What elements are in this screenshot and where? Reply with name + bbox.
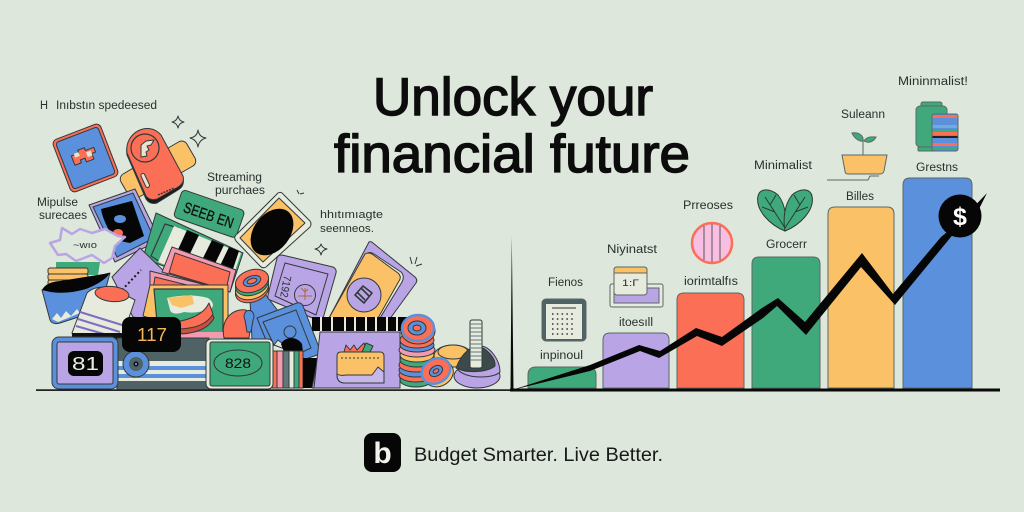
icon: yellow backing tag (118, 139, 198, 201)
label: right pile note: seenneos. (320, 223, 374, 235)
icon: yellow card with black oval (235, 192, 311, 268)
label: streaming purchases (207, 172, 265, 197)
label: impulse purchases (37, 197, 87, 222)
chart labels: iorimtalfıs (684, 276, 738, 288)
label: top spending heading: H (40, 100, 48, 112)
icon: green backing shape (56, 262, 100, 275)
icon: twin leaves (758, 190, 812, 231)
title (334, 68, 690, 184)
icon: burst badge (50, 228, 125, 263)
icon: pink frame cards (143, 247, 236, 338)
icon: green 828 note: 828 (225, 355, 251, 371)
title: Unlock your (373, 68, 653, 127)
chart labels: Mininmalist! (898, 76, 968, 88)
icon: purple lined card (112, 248, 168, 320)
icon: green 828 note (206, 339, 273, 389)
label: top spending heading: Inıbstın spedeesed (56, 100, 157, 112)
icon: potted sprout (827, 133, 887, 180)
icon: film strip bar (312, 317, 408, 331)
label: streaming purchases: Streaming (207, 172, 262, 184)
bar: itoesill (603, 333, 669, 388)
icon: coin stacks (399, 315, 472, 392)
bar: grestns (903, 178, 972, 388)
icon: red device (127, 128, 183, 204)
icon: purple 7192 card (268, 255, 336, 322)
bar: billes (828, 207, 894, 388)
chart labels: Grestns (916, 162, 958, 174)
bar: iorimtalfis (677, 293, 744, 388)
icon: colored strip stack (272, 351, 322, 388)
chart axes (36, 236, 1000, 392)
icon: sparkles (172, 116, 422, 266)
icon: spring on dark weight (454, 320, 500, 388)
icon: blue blob and clip (223, 290, 285, 340)
chart labels: Minimalist (754, 160, 813, 172)
label: impulse purchases: Mipulse (37, 197, 78, 209)
chart labels: Fienos (548, 277, 583, 289)
footer: logo and tagline (364, 433, 663, 472)
icon: dark striped band (117, 338, 209, 390)
panel: pile of spending items (37, 100, 500, 392)
chart labels: Suleann (841, 109, 885, 121)
trend line (512, 193, 987, 390)
chart labels: inpinoul (540, 350, 583, 362)
icon: striped circle (692, 223, 732, 263)
icon: purple 7192 card: 7192 (277, 274, 293, 298)
icon: green sign (173, 189, 245, 238)
label: impulse purchases: surecaes (39, 210, 87, 222)
icon: green sign: SEEB EN (181, 199, 236, 232)
bar: grocerr (752, 257, 820, 388)
label: right pile note (320, 209, 383, 235)
icon: purple diamond with yellow card (328, 242, 417, 320)
bar: inpinoul (528, 367, 596, 388)
icon: green wallet with striped notes (916, 102, 958, 151)
icon: purple and blue card (89, 189, 160, 262)
icon: blue ring (123, 351, 149, 377)
icon: 117 badge (122, 317, 181, 352)
tagline: Budget Smarter. Live Better. (414, 444, 663, 466)
icon: dollar coin: $ (953, 203, 967, 231)
icon: purple box with wallet (314, 332, 400, 388)
icon: blue card (257, 303, 320, 360)
icon: b logo (364, 433, 401, 472)
label: right pile note: hhıtımıagte (320, 209, 383, 221)
icon: dollar coin (938, 194, 982, 238)
label: burst text: ~wıo (73, 240, 97, 250)
icon: 81 badge (52, 337, 118, 389)
icon: overlapping cards: 1:Γ (622, 278, 639, 288)
chart labels (540, 76, 968, 362)
chart labels: Grocerr (766, 239, 807, 251)
icon: blue card with red frame (52, 123, 119, 193)
chart labels: Prreoses (683, 200, 733, 212)
label: streaming purchases: purchaes (215, 185, 265, 197)
icon: b logo: b (373, 437, 392, 470)
icon: coin spool (232, 265, 272, 307)
icon: 117 badge: 117 (137, 325, 167, 345)
panel: growth chart (36, 76, 1000, 392)
chart labels: Niyinatst (607, 244, 658, 256)
icon: 81 badge: 81 (72, 354, 99, 374)
icon: calculator (542, 299, 586, 341)
chart labels: Billes (846, 191, 874, 203)
icon: white striped can (72, 285, 135, 340)
icon: green striped card (143, 213, 243, 292)
chart labels: itoesıll (619, 317, 653, 329)
title: financial future (334, 125, 690, 184)
icon: blue bucket with yellow stack (42, 268, 110, 324)
icon: overlapping cards (610, 267, 663, 307)
